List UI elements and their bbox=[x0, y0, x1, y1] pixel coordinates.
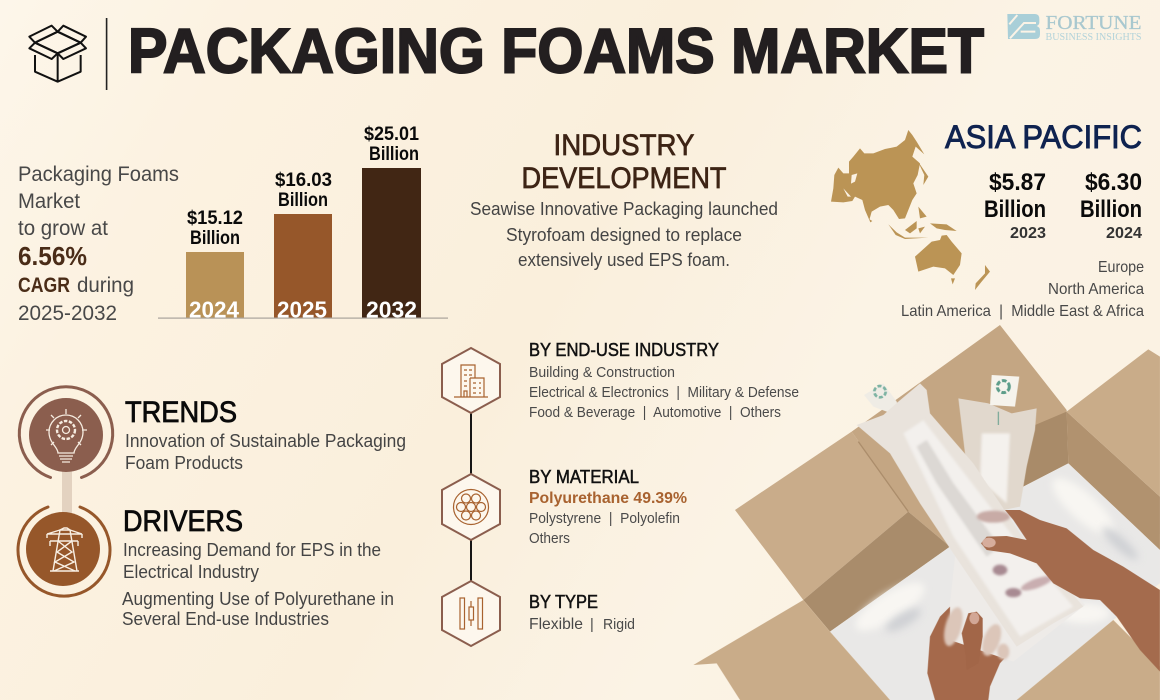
title: PACKAGING FOAMS MARKET bbox=[128, 16, 984, 86]
text: drivers bbox=[122, 505, 394, 629]
text: trends: Innovation of Sustainable Packaging bbox=[125, 431, 406, 451]
panel: Asia Pacific values: ASIA PACIFIC bbox=[945, 119, 1142, 155]
text: by type: | bbox=[590, 617, 594, 633]
text: by end-use industry bbox=[529, 340, 799, 421]
text: market growth statement bbox=[18, 163, 179, 325]
bar chart: market size: $25.01 bbox=[364, 124, 419, 145]
bar chart: market size bbox=[158, 124, 448, 322]
text: by material: Polystyrene | Polyolefin bbox=[529, 511, 680, 527]
panel: industry development: INDUSTRY bbox=[554, 129, 694, 162]
icon: type hexagon bbox=[442, 581, 500, 646]
text: trends: Foam Products bbox=[125, 453, 243, 473]
logo: Fortune Business Insights bbox=[1007, 12, 1142, 43]
lower body of bag bbox=[950, 537, 1085, 662]
bar chart: market size: 2024 bbox=[189, 296, 239, 322]
text: by end-use industry: BY END-USE INDUSTRY bbox=[529, 340, 719, 360]
icon: drivers transmission tower bbox=[18, 507, 110, 596]
connector: trends to drivers bbox=[62, 470, 72, 514]
bar chart: market size: Billion bbox=[278, 190, 328, 211]
panel: industry development: extensively used EPS foam. bbox=[518, 250, 730, 270]
panel: Asia Pacific values: Billion bbox=[984, 196, 1046, 223]
text: by material: BY MATERIAL bbox=[529, 467, 639, 487]
bar chart: market size: $15.12 bbox=[187, 208, 243, 229]
panel: Asia Pacific values: $5.87 bbox=[989, 169, 1046, 196]
text: market growth statement: 2025-2032 bbox=[18, 302, 117, 325]
text: by material bbox=[529, 467, 687, 547]
text: by end-use industry: Electrical & Electronics | Military & Defense bbox=[529, 385, 799, 401]
panel: Asia Pacific values: 2023 bbox=[1010, 225, 1046, 242]
text: other regions: Europe bbox=[1098, 259, 1144, 276]
text: trends: TRENDS bbox=[125, 396, 237, 429]
text: by type: BY TYPE bbox=[529, 592, 598, 612]
bar chart: market size: $16.03 bbox=[275, 170, 332, 191]
text: drivers: Increasing Demand for EPS in the bbox=[123, 540, 381, 560]
rear air bag bbox=[958, 375, 1037, 510]
photo: open cardboard box with air cushion packaging bbox=[693, 325, 1160, 700]
text: by material: Others bbox=[529, 531, 570, 547]
text: market growth statement: Market bbox=[18, 190, 80, 213]
logo: Fortune Business Insights: FORTUNE bbox=[1046, 12, 1142, 34]
text: by type bbox=[529, 592, 635, 633]
text: market growth statement: 6.56% bbox=[18, 241, 87, 271]
bar chart: market size: 2032 bbox=[366, 296, 417, 322]
fingers seen through bag bbox=[977, 511, 1054, 597]
text: trends bbox=[125, 396, 406, 473]
text: market growth statement: to grow at bbox=[18, 217, 108, 240]
text: market growth statement: Packaging Foams bbox=[18, 163, 179, 186]
text: by end-use industry: Food & Beverage | Automotive | Others bbox=[529, 405, 781, 421]
icon: open box bbox=[29, 26, 86, 82]
text: drivers: Several End-use Industries bbox=[122, 609, 329, 629]
panel: Asia Pacific values bbox=[945, 119, 1142, 242]
panel: industry development: DEVELOPMENT bbox=[522, 162, 726, 195]
front air bag tube bbox=[857, 383, 1083, 647]
panel: industry development: Styrofoam designed to replace bbox=[506, 225, 742, 245]
panel: Asia Pacific values: $6.30 bbox=[1085, 169, 1142, 196]
bar chart: market size: 2025 bbox=[277, 296, 327, 322]
text: drivers: DRIVERS bbox=[123, 505, 243, 538]
text: drivers: Augmenting Use of Polyurethane in bbox=[122, 589, 394, 609]
icon: trends lightbulb bbox=[19, 387, 113, 478]
map: Asia Pacific bbox=[831, 130, 990, 290]
lower hand thumb bbox=[962, 612, 983, 670]
text: market growth statement: CAGR bbox=[18, 274, 70, 297]
text: by type: Rigid bbox=[603, 617, 635, 633]
text: by end-use industry: Building & Construction bbox=[529, 365, 675, 381]
text: market growth statement: during bbox=[77, 274, 134, 297]
icon: buildings hexagon bbox=[442, 348, 500, 413]
panel: industry development bbox=[470, 129, 778, 270]
panel: Asia Pacific values: 2024 bbox=[1106, 225, 1142, 242]
text: other regions bbox=[901, 259, 1144, 320]
air bags and hands bbox=[857, 375, 1160, 700]
text: by material: Polyurethane 49.39% bbox=[529, 490, 687, 507]
text: drivers: Electrical Industry bbox=[123, 562, 259, 582]
connector: segment timeline bbox=[470, 413, 472, 581]
pale fingers behind bag film bbox=[940, 605, 1009, 660]
box interior and flaps bbox=[693, 325, 1160, 700]
text: other regions: North America bbox=[1048, 281, 1144, 298]
text: by type: Flexible bbox=[529, 616, 583, 633]
logo: Fortune Business Insights: BUSINESS INSIGHTS bbox=[1046, 32, 1142, 43]
right hand and arm bbox=[981, 510, 1160, 672]
text: other regions: Latin America | Middle East & Africa bbox=[901, 303, 1144, 320]
panel: industry development: Seawise Innovative Packaging launched bbox=[470, 199, 778, 219]
bar chart: market size: Billion bbox=[369, 144, 419, 165]
lower hand bbox=[927, 605, 1009, 700]
bar chart: market size: Billion bbox=[190, 228, 240, 249]
icon: material hexagon bbox=[442, 474, 500, 540]
panel: Asia Pacific values: Billion bbox=[1080, 196, 1142, 223]
